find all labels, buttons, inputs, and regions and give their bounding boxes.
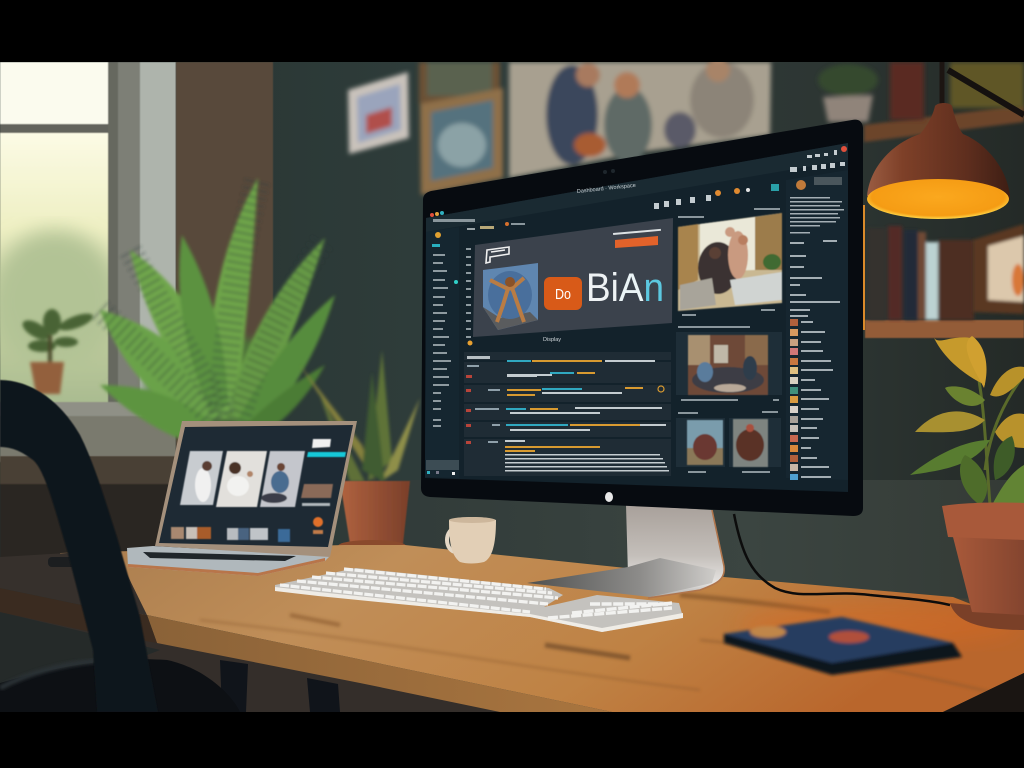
sidebar avatars [790, 319, 798, 480]
hero banner [473, 218, 673, 337]
shelf vases [890, 62, 1024, 120]
feed row labels [466, 375, 472, 444]
caption status dot [468, 340, 472, 346]
books [868, 226, 974, 320]
lower shelf [865, 320, 1024, 338]
plant stems [972, 345, 1024, 505]
picture frames on wall [348, 58, 771, 195]
hero tag label [613, 229, 661, 235]
keyboard front edge [275, 587, 683, 632]
desk front edge [147, 615, 612, 712]
dark mat edge [0, 588, 157, 643]
monitor cable [734, 514, 950, 605]
logo text BiAn: BiAn [586, 266, 664, 310]
hero caption: Display [543, 337, 561, 343]
laptop thumbnails [171, 527, 290, 542]
middle image column [676, 208, 782, 473]
plant leaves [910, 336, 1024, 505]
orange logo tile [544, 277, 582, 310]
potted snake plant behind laptop [300, 350, 420, 552]
small framed picture [348, 72, 409, 154]
top toolbar [426, 143, 848, 232]
desk [0, 545, 1024, 712]
pot saucer [950, 603, 1024, 630]
laptop [48, 421, 357, 576]
laptop screen [159, 425, 353, 547]
dark woven mat at desk left [0, 553, 147, 615]
laptop side panel [301, 439, 346, 534]
feed text lines [505, 360, 669, 472]
framed photo on shelf [973, 224, 1024, 314]
desk top [60, 545, 1024, 712]
pot rim [942, 502, 1024, 540]
under-desk wall [0, 600, 612, 712]
phone under laptop edge [48, 557, 78, 567]
laptop photo tiles [180, 451, 305, 507]
desk front corner right [943, 673, 1024, 712]
lower wooden frame [420, 88, 503, 195]
large family photo [509, 58, 771, 178]
fern foliage glow [145, 335, 295, 435]
wood grain [200, 595, 1024, 700]
chair seat highlight [0, 661, 95, 688]
gallery labels [678, 208, 780, 473]
toolbar icons [654, 150, 845, 209]
gallery thumbnail panels [676, 418, 781, 467]
laptop base [127, 546, 330, 576]
right sidebar [786, 170, 848, 480]
window sill and lower wall [0, 456, 200, 559]
monitor stand [527, 505, 724, 598]
office chair [0, 380, 240, 712]
warm desk lighting [740, 603, 1020, 647]
smartphone [724, 617, 962, 675]
keyboard [275, 568, 683, 632]
screen [425, 143, 848, 492]
second gallery photo [688, 335, 768, 395]
chair back [0, 380, 158, 712]
keyboard body [275, 568, 683, 632]
camera [603, 169, 615, 174]
second gallery panel [676, 332, 782, 395]
top middle frame [419, 62, 500, 104]
desk lamp [867, 62, 1024, 219]
window buttons [430, 146, 847, 217]
tan wall section [176, 62, 273, 462]
feed row status icon [658, 386, 664, 392]
chair seat [0, 659, 240, 712]
gallery thumbnails [687, 419, 768, 467]
feed rows [464, 352, 671, 476]
monitor [421, 120, 865, 516]
potted plant right [910, 336, 1024, 630]
logo text Do: Do [555, 286, 571, 303]
hero logo small [486, 247, 509, 263]
title bar tabs [433, 219, 525, 230]
terracotta pot [953, 537, 1024, 615]
taskbar [427, 471, 485, 476]
feed list panel [464, 352, 671, 476]
window with frame [0, 62, 176, 462]
monitor bezel [421, 120, 863, 516]
lower wall [340, 480, 1024, 610]
hero orange tag [615, 236, 658, 248]
logo on chin [605, 492, 613, 502]
shelf plant [818, 64, 878, 122]
shelves with books and plant [818, 62, 1024, 338]
small windowsill plant [20, 309, 95, 394]
keys [280, 569, 558, 612]
large gallery photo [678, 213, 782, 311]
desk legs [220, 660, 248, 712]
coffee cup [447, 517, 496, 564]
top shelf [864, 105, 1024, 142]
left sidebar [425, 227, 471, 478]
laptop lid [155, 421, 357, 557]
toolbar title: Dashboard · Workspace [577, 183, 636, 195]
fern plant [100, 178, 335, 445]
hero image: figure [483, 263, 538, 330]
numeric keypad keys [548, 603, 672, 618]
lamp-lit monitor edge [860, 205, 865, 330]
